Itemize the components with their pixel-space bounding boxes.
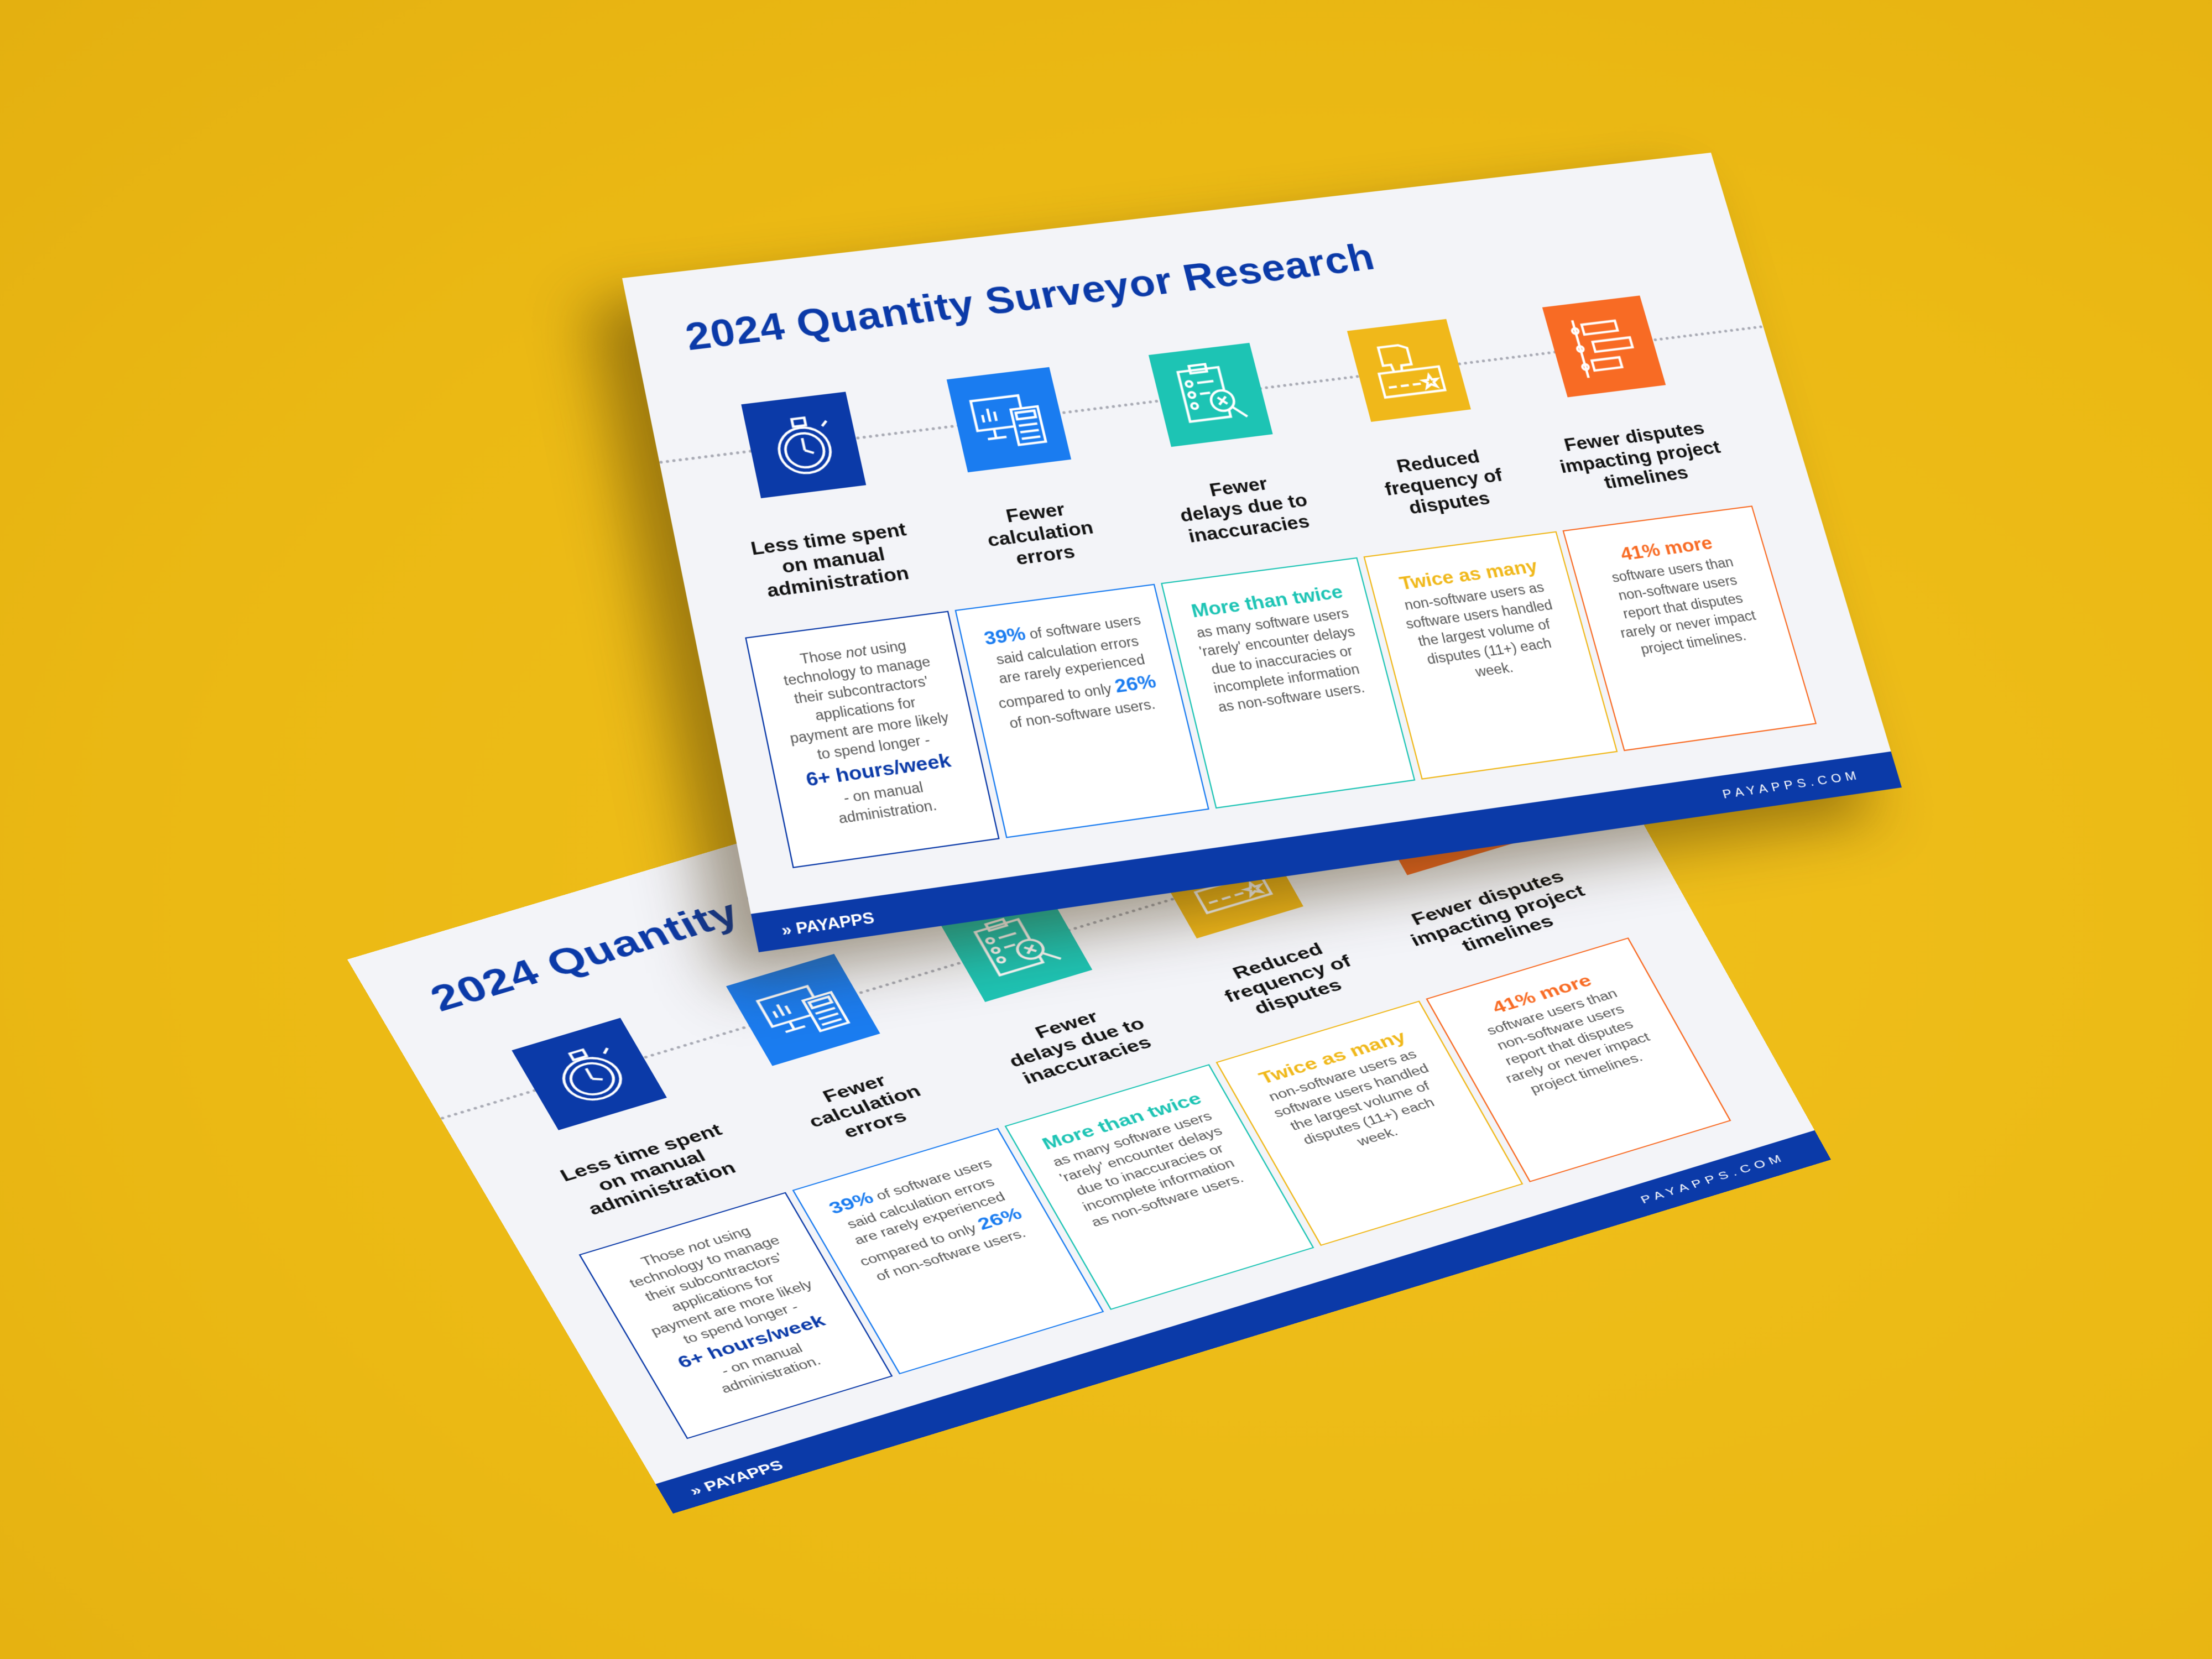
stat box (1363, 531, 1618, 780)
stat box: as many software users 'rarely' encounter delays due to inaccuracies or incomplete information as non-software users. (1050, 1109, 1246, 1229)
column: fewer delays (1074, 204, 1419, 823)
heading: Fewer (819, 1071, 889, 1106)
stat box: Twice as many (1397, 555, 1540, 594)
heading: Fewer (1004, 498, 1067, 526)
icon: timeline (1542, 295, 1666, 397)
stat box: 39% of software users said calculation errors are rarely experienced compared to only 26% of non-software users. (825, 1156, 1028, 1284)
icon: thumbs down card (1347, 319, 1471, 422)
stat box (579, 1192, 893, 1439)
column: fewer delays (941, 909, 1314, 1310)
stat box (1426, 937, 1731, 1182)
icon: stopwatch (512, 1018, 667, 1130)
stat box: as many software users 'rarely' encounter delays due to inaccuracies or incomplete information as non-software users. (1195, 606, 1366, 715)
heading: Fewer (1207, 473, 1270, 500)
stat box: - on manual administration. (837, 779, 938, 826)
column: timelines (1399, 843, 1731, 1182)
icon: monitor calculator (726, 953, 880, 1066)
heading: calculation (985, 517, 1095, 551)
column: disputes (1271, 181, 1622, 795)
heading (1537, 414, 1744, 500)
heading (1221, 939, 1354, 1018)
heading (1339, 439, 1548, 526)
icon: timeline (1399, 843, 1513, 875)
stat box: 39% of software users said calculation errors are rarely experienced compared to only 26% of non-software users. (982, 612, 1158, 731)
title: 2024 Quantity Surveyor Research (682, 236, 1379, 358)
stat box: software users than non-software users report that disputes rarely or never impact project timelines. (1610, 554, 1757, 657)
heading: Fewer disputes (1408, 867, 1567, 929)
heading: errors (840, 1106, 910, 1141)
footer bar: » PAYAPPS (687, 1457, 786, 1499)
icon: thumbs down card (1170, 876, 1304, 939)
column: timelines (1465, 160, 1821, 766)
card: front infographic (622, 153, 1902, 952)
title: 2024 Quantity Surveyor Research (423, 764, 1175, 1019)
icon: clipboard magnifier (1149, 343, 1273, 447)
stat box (1161, 557, 1415, 808)
stat box: software users than non-software users report that disputes rarely or never impact project timelines. (1484, 987, 1652, 1096)
stat box: 41% more (1489, 971, 1595, 1017)
icon: clipboard magnifier (941, 909, 1093, 1002)
heading: on manual (594, 1146, 709, 1195)
heading: inaccuracies (1186, 510, 1312, 546)
heading: Reduced (1394, 446, 1481, 477)
heading: frequency of (1221, 951, 1354, 1006)
heading: administration (765, 562, 911, 601)
footer bar (656, 1130, 1831, 1514)
heading: administration (585, 1158, 739, 1219)
stat box: More than twice (1189, 581, 1345, 622)
stat box: non-software users as software users handled the largest volume of disputes (11+) each week. (1403, 580, 1554, 680)
stat box (954, 584, 1209, 838)
stat box: 6+ hours/week (674, 1311, 828, 1372)
stat box: non-software users as software users handled the largest volume of disputes (11+) each week. (1266, 1047, 1437, 1149)
heading: delays due to (1178, 489, 1310, 526)
stat box (1215, 1000, 1523, 1246)
heading: Less time spent (556, 1120, 726, 1185)
heading: disputes (1406, 487, 1492, 518)
heading: impacting project (1407, 881, 1588, 950)
footer bar (751, 752, 1902, 952)
stat box: 41% more (1618, 532, 1715, 565)
footer bar: PAYAPPS.COM (1721, 768, 1862, 801)
column: disputes (1170, 876, 1524, 1246)
footer bar: PAYAPPS.COM (1639, 1151, 1788, 1206)
stat box: - on manual administration. (718, 1341, 823, 1396)
footer bar: » PAYAPPS (780, 908, 876, 940)
column: less time spent (512, 1018, 893, 1439)
stat box (745, 611, 1000, 868)
heading: calculation (805, 1081, 924, 1131)
heading (985, 498, 1095, 569)
stat box (1562, 505, 1817, 751)
heading (556, 1120, 739, 1219)
heading: timelines (1601, 462, 1691, 493)
card: back infographic (347, 609, 1831, 1514)
heading: Fewer disputes (1562, 418, 1707, 455)
stat box (1004, 1064, 1314, 1310)
heading: impacting project (1557, 436, 1723, 477)
stat box: Twice as many (1255, 1027, 1409, 1088)
heading (1005, 1006, 1155, 1088)
heading: inaccuracies (1019, 1032, 1155, 1088)
heading (749, 519, 911, 601)
icon: stopwatch (741, 392, 866, 499)
heading: timelines (1458, 911, 1557, 955)
stat box: Those not using technology to manage their subcontractors' applications for payment are more likely to spend longer - (782, 638, 950, 763)
column: calculation errors (947, 367, 1210, 838)
heading: delays due to (1005, 1014, 1148, 1071)
column: calculation errors (726, 953, 1104, 1375)
stat box: Those not using technology to manage their subcontractors' applications for payment are more likely to spend longer - (627, 1224, 815, 1347)
heading: on manual (780, 543, 887, 577)
stat box: 6+ hours/week (804, 749, 953, 790)
heading: frequency of (1383, 465, 1505, 499)
stat box (792, 1128, 1104, 1374)
column: less time spent (741, 392, 1000, 868)
heading (1138, 464, 1349, 552)
heading: disputes (1250, 975, 1345, 1018)
heading: Fewer (1031, 1006, 1102, 1042)
heading: errors (1014, 541, 1077, 569)
heading: Less time spent (749, 519, 908, 559)
stat box: More than twice (1039, 1089, 1205, 1153)
icon: monitor calculator (947, 367, 1072, 472)
heading: Reduced (1229, 939, 1326, 983)
